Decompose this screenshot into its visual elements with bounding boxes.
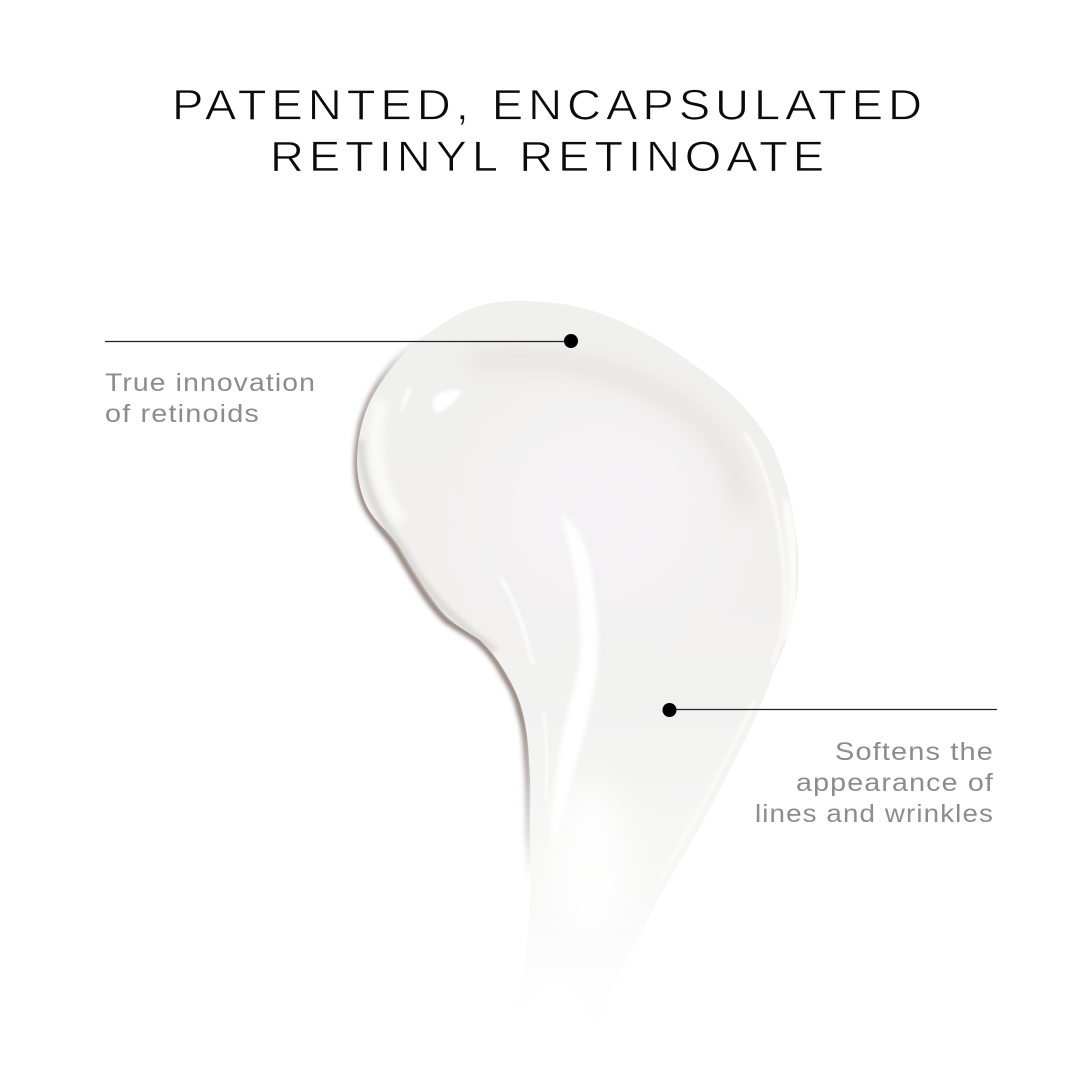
title [172,82,927,181]
leader line [670,708,997,710]
callout: softens lines and wrinkles [662,703,997,828]
label text: of retinoids [105,400,260,428]
label text: lines and wrinkles [755,800,994,828]
marker dot [564,334,578,348]
label text [755,738,994,828]
swatch shading and highlights [358,352,796,832]
label text: Softens the [835,738,994,766]
callout: true innovation of retinoids [105,334,578,428]
leader line [105,340,571,342]
title: PATENTED, ENCAPSULATED [172,82,927,130]
marker dot [662,703,676,717]
label text: True innovation [105,369,316,397]
title: RETINYL RETINOATE [270,133,829,181]
cast shadow of the swatch [357,338,529,885]
label text [105,369,316,428]
cream swatch [350,300,798,870]
label text: appearance of [796,769,994,797]
swatch body [357,301,798,1073]
